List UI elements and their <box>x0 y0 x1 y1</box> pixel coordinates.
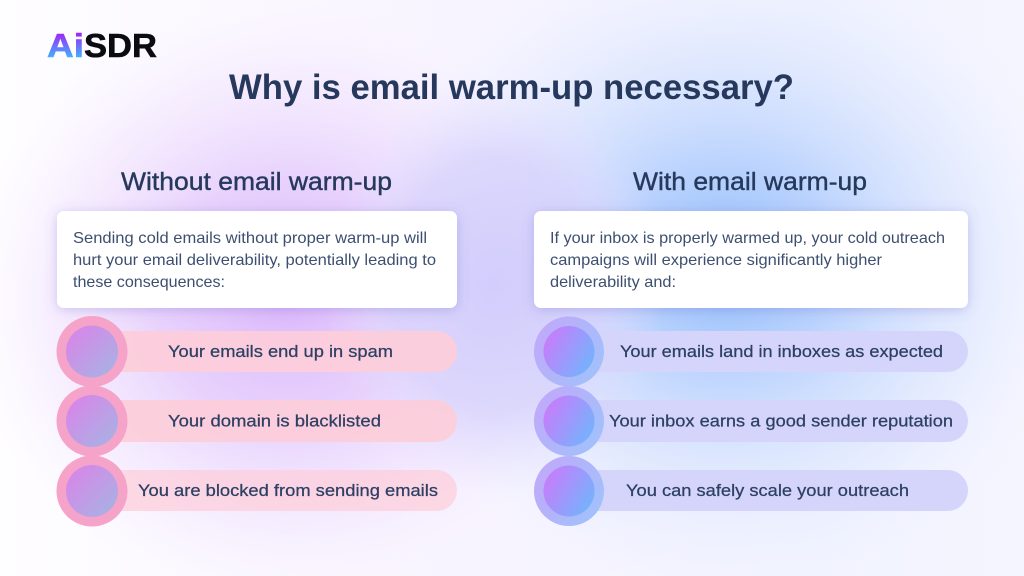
item: safely scale outreach: You can safely scale your outreach <box>626 481 909 500</box>
logo: AiSDR <box>47 27 157 64</box>
item: good sender reputation <box>534 386 968 456</box>
item: blocked from sending emails: You are blocked from sending emails <box>138 481 438 500</box>
item: domain is blacklisted: Your domain is blacklisted <box>168 412 381 430</box>
panel: without email warm-up <box>56 168 457 526</box>
text card: without warm-up: hurt your email deliverability, potentially leading to <box>73 252 436 269</box>
logo: AiSDR: Ai <box>47 27 84 64</box>
item: emails land in inboxes <box>534 316 968 386</box>
item: emails end up in spam <box>56 316 457 387</box>
item: safely scale outreach <box>534 456 968 526</box>
panel: with email warm-up <box>534 168 968 526</box>
text card: with warm-up <box>534 211 968 308</box>
item: emails land in inboxes: Your emails land in inboxes as expected <box>620 342 943 361</box>
item: domain is blacklisted <box>56 386 457 456</box>
item: good sender reputation: Your inbox earns a good sender reputation <box>609 412 953 430</box>
text card: without warm-up: these consequences: <box>73 274 225 291</box>
heading: without email warm-up: Without email warm-up <box>121 168 392 196</box>
text card: with warm-up: deliverability and: <box>550 274 676 291</box>
logo: AiSDR: SDR <box>84 27 157 64</box>
title: Why is email warm-up necessary? <box>229 68 794 107</box>
heading: with email warm-up: With email warm-up <box>633 168 867 196</box>
text card: with warm-up: If your inbox is properly warmed up, your cold outreach <box>550 230 945 247</box>
text card: without warm-up <box>57 211 457 308</box>
text card: without warm-up: Sending cold emails without proper warm-up will <box>73 230 427 247</box>
text card: with warm-up: campaigns will experience significantly higher <box>550 252 883 269</box>
item: emails end up in spam: Your emails end up in spam <box>168 342 393 361</box>
item: blocked from sending emails <box>56 456 457 526</box>
